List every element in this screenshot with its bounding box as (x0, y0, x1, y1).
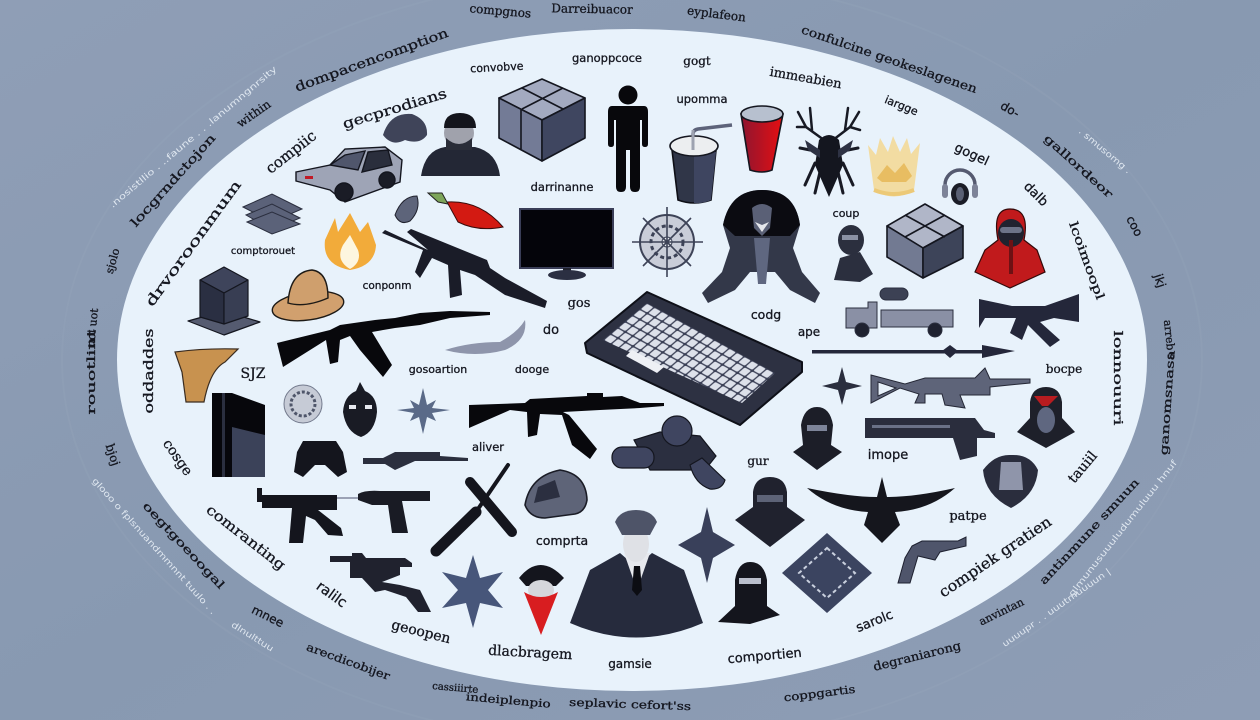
icon: black pistol (358, 491, 430, 533)
icon: eagle emblem (807, 477, 955, 543)
icon: round wheel emblem (632, 207, 703, 277)
icon: prone soldier (612, 416, 725, 489)
label: comptorouet: comptorouet (231, 246, 295, 257)
label: compgnos: compgnos (469, 1, 532, 21)
icon: snowflake ornament (442, 555, 503, 628)
icon: round pattern (284, 385, 322, 423)
icon: antlered creature (797, 108, 860, 197)
icon: star ornament (678, 507, 735, 583)
icon: game controller (294, 441, 347, 477)
icon: large grey gun (865, 418, 995, 460)
label: jkj: jkj (1151, 271, 1169, 289)
icon: masked head with red visor (1017, 387, 1075, 448)
label: comportien: comportien (727, 646, 802, 667)
label: gogt: gogt (683, 54, 711, 68)
label: patpe: patpe (949, 509, 987, 524)
label: gallordeor: gallordeor (1041, 132, 1116, 201)
label: eyplafeon: eyplafeon (686, 3, 747, 25)
label: ganoppcoce: ganoppcoce (572, 51, 642, 65)
label: ralilc: ralilc (313, 578, 350, 611)
label: compiek gratien: compiek gratien (935, 512, 1055, 601)
label: dalb: dalb (1020, 179, 1051, 210)
label: convobve: convobve (470, 60, 524, 75)
icon: computer monitor (520, 209, 613, 280)
label: geoopen: geoopen (390, 617, 452, 647)
label: gur: gur (747, 454, 769, 468)
label: iargge: iargge (883, 93, 920, 118)
label: locgrndctojon: locgrndctojon (128, 131, 219, 230)
icon: small star (822, 367, 862, 405)
icon: stack of papers (243, 194, 302, 234)
central oval panel (117, 29, 1147, 691)
label: gecprodians: gecprodians (341, 86, 449, 133)
label: coup: coup (833, 207, 859, 220)
icon: headphones (942, 170, 978, 205)
label: outer light text upper right: . smusomg . (1076, 127, 1132, 176)
label: arecdicobijer: arecdicobijer (305, 641, 393, 683)
label: ape: ape (798, 325, 820, 339)
label: outer light text lower right: glmunusuuuludumuluuu hnuf (1067, 458, 1181, 599)
icon: flame (325, 213, 376, 270)
icon: dark bust (834, 225, 873, 282)
icon: ornamental cross (397, 388, 450, 434)
icon: soldier bust (421, 113, 500, 176)
label: coppgartis: coppgartis (783, 683, 857, 704)
label: imope: imope (868, 448, 908, 463)
icon: game console (212, 393, 265, 477)
icon: cube on pedestal (188, 267, 260, 335)
icon: helmet (525, 470, 587, 518)
icon: grey car (296, 147, 402, 202)
label: do-: do- (998, 99, 1022, 120)
label: tauiil: tauiil (1065, 448, 1101, 487)
icon: red feather (428, 193, 503, 229)
label: do: do (543, 323, 559, 338)
label: SJZ: SJZ (241, 366, 266, 382)
label: antinmune smun: antinmune smuun (1037, 476, 1142, 587)
icon: dark mask (343, 382, 377, 437)
label: gosoartion: gosoartion (409, 363, 467, 376)
icon: crossed rifles (436, 465, 512, 551)
icon: grey feather (445, 320, 525, 354)
label: immeabien: immeabien (768, 65, 843, 92)
label: comprta: comprta (536, 533, 588, 548)
label: dooge: dooge (515, 363, 549, 376)
label: cassiiirte: cassiiirte (432, 681, 479, 696)
icon: dark rock mask (383, 114, 427, 143)
icon: large grey box (499, 79, 585, 161)
icon: thin gun (363, 452, 468, 470)
label: darrinanne: darrinanne (531, 180, 593, 194)
label: dompacencomption: dompacencomption (293, 26, 451, 95)
icon: hooded mask (793, 407, 842, 470)
label: uot: uoi uot (84, 307, 101, 348)
icon: keyboard (585, 292, 802, 425)
icon: grey assault rifle (871, 368, 1030, 408)
icon: central black rifle (469, 393, 664, 459)
icon: ninja (718, 562, 780, 624)
label: anvintan: anvintan (977, 595, 1026, 628)
label: oegtgoeoogal: oegtgoeoogal (140, 499, 228, 592)
label: confulcine geokeslagenen: confulcine geokeslagenen (800, 22, 979, 96)
icon: large black rifle (277, 311, 490, 377)
icon: revolver pistol (330, 553, 431, 612)
label: lcoimoopl: lcoimoopl (1066, 220, 1107, 302)
label: ganomsnasa: ganomsnasa (1157, 349, 1178, 456)
label: arreb: arreb s (1161, 319, 1178, 360)
label: comranting: comranting (203, 502, 288, 574)
icon: hooded fur figure (702, 190, 820, 303)
label: darreibuacor: Darreibuacor (551, 1, 633, 17)
label: cosge: cosge (159, 436, 196, 479)
icon: right black rifle (979, 294, 1079, 347)
icon: diagonal rifle (382, 229, 547, 308)
label: outer light text lower right short: uuuupr . . uuutmuuuun | (1001, 567, 1113, 650)
icon: bronze horn emblem (175, 349, 238, 402)
label: aliver: aliver (472, 440, 504, 454)
label: dlacbragem: dlacbragem (488, 643, 573, 663)
label: compiic: compiic (262, 127, 320, 177)
label: bocpe: bocpe (1046, 362, 1082, 376)
label: drvoroonmum: drvoroonmum (143, 177, 245, 310)
label: lonnouur: lonnouuri (1111, 330, 1125, 426)
icon: drink cup with straw (670, 125, 732, 203)
label: within: within (234, 97, 274, 130)
label: upomma: upomma (676, 92, 728, 106)
label: rouotlint: rouotlint (85, 329, 98, 414)
label: seplavic cefort'ss: seplavic cefort'ss (569, 696, 692, 713)
icon: black person (608, 86, 648, 192)
icon: hooded head bust (735, 477, 805, 547)
label: gos: gos (568, 296, 590, 311)
icon: round badge (983, 455, 1038, 508)
icon: brown hat (270, 270, 346, 325)
icon: golden crown (868, 136, 920, 196)
label: degraniarong: degraniarong (872, 638, 963, 674)
label: gamsie: gamsie (608, 657, 652, 671)
label: outer light text upper left: .nosistllio . ..faune . . .lanumngnrsity (108, 65, 279, 210)
label: bjoj: bjoj (103, 442, 123, 468)
icon: truck (846, 288, 953, 337)
label: coo: coo (1123, 213, 1146, 239)
icon: red cup (741, 106, 783, 172)
label: outer light text lower left short: dlnulttuu (229, 620, 275, 654)
label: sjolo: sjolo (103, 246, 123, 275)
icon: red hoodie figure (975, 209, 1045, 288)
label: mnee: mnee (249, 603, 286, 630)
icon: grey stone (395, 196, 418, 223)
icon: red bandana figure (519, 565, 564, 635)
label: sarolc: sarolc (854, 608, 895, 636)
icon: spear (812, 345, 1015, 358)
label: outer light text lower left: glooo o fplsnuandmmnnt tuulo . . (90, 476, 217, 617)
icon: submachine gun (257, 488, 359, 543)
label: conponm: conponm (363, 280, 411, 292)
icon: diamond pattern (782, 533, 872, 613)
label: oddaddes: oddaddes (142, 328, 157, 414)
label: gogel: gogel (952, 140, 991, 169)
label: indeiplenpio: indeiplenpio (465, 690, 552, 711)
icon: grey cube (887, 204, 963, 278)
icon: silver revolver (898, 537, 966, 583)
label: codg: codg (751, 307, 781, 322)
icon: police officer (570, 510, 703, 638)
